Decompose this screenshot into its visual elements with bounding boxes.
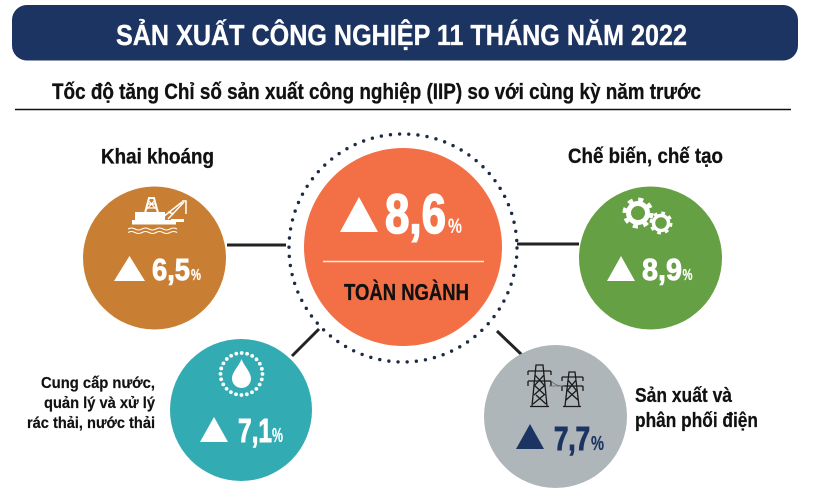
connector lines [227,244,579,356]
triangle up [607,256,635,281]
value: 7,7 [554,420,590,457]
heading: Sản xuất và [635,385,733,407]
circle [83,186,226,330]
label: TOÀN NGÀNH [344,278,469,305]
heading: quản lý và xử lý [44,395,155,412]
icon: pylons [528,365,583,406]
heading: Chế biến, chế tạo [568,145,723,168]
heading: Cung cấp nước, [41,375,155,392]
dotted ring [289,134,517,362]
value: 6,5 [152,252,190,287]
subtitle: Tốc độ tăng Chỉ số sản xuất công nghiệp (IIP) so với cùng kỳ năm trước [52,79,701,104]
heading [27,375,155,432]
value: 8,9 [642,252,682,287]
percent sign: % [682,267,692,284]
icon: water drop [220,353,262,395]
orange circle [304,148,502,346]
percent sign: % [191,267,201,284]
circle [170,339,312,481]
circle [579,186,722,330]
panel: total industry [289,134,517,362]
triangle up [200,417,228,442]
icon: gears [624,200,671,233]
circle [484,345,627,488]
divider [323,260,484,262]
percent sign: % [591,433,604,455]
triangle up [114,256,145,281]
panel: manufacturing [568,145,723,330]
panel: electricity [484,345,758,488]
panel: mining [83,146,226,330]
percent sign: % [272,425,283,447]
value: 8,6 [385,182,446,245]
heading [635,385,758,432]
heading: Khai khoáng [101,146,214,168]
triangle up [516,424,544,449]
triangle up [340,197,378,232]
heading: phân phối điện [635,410,758,432]
panel: water supply [27,339,312,481]
title banner [12,5,798,60]
title banner: SẢN XUẤT CÔNG NGHIỆP 11 THÁNG NĂM 2022 [116,18,687,52]
percent sign: % [448,215,462,238]
icon: oil rig [128,198,187,234]
heading: rác thải, nước thải [27,415,155,432]
value: 7,1 [238,412,272,449]
